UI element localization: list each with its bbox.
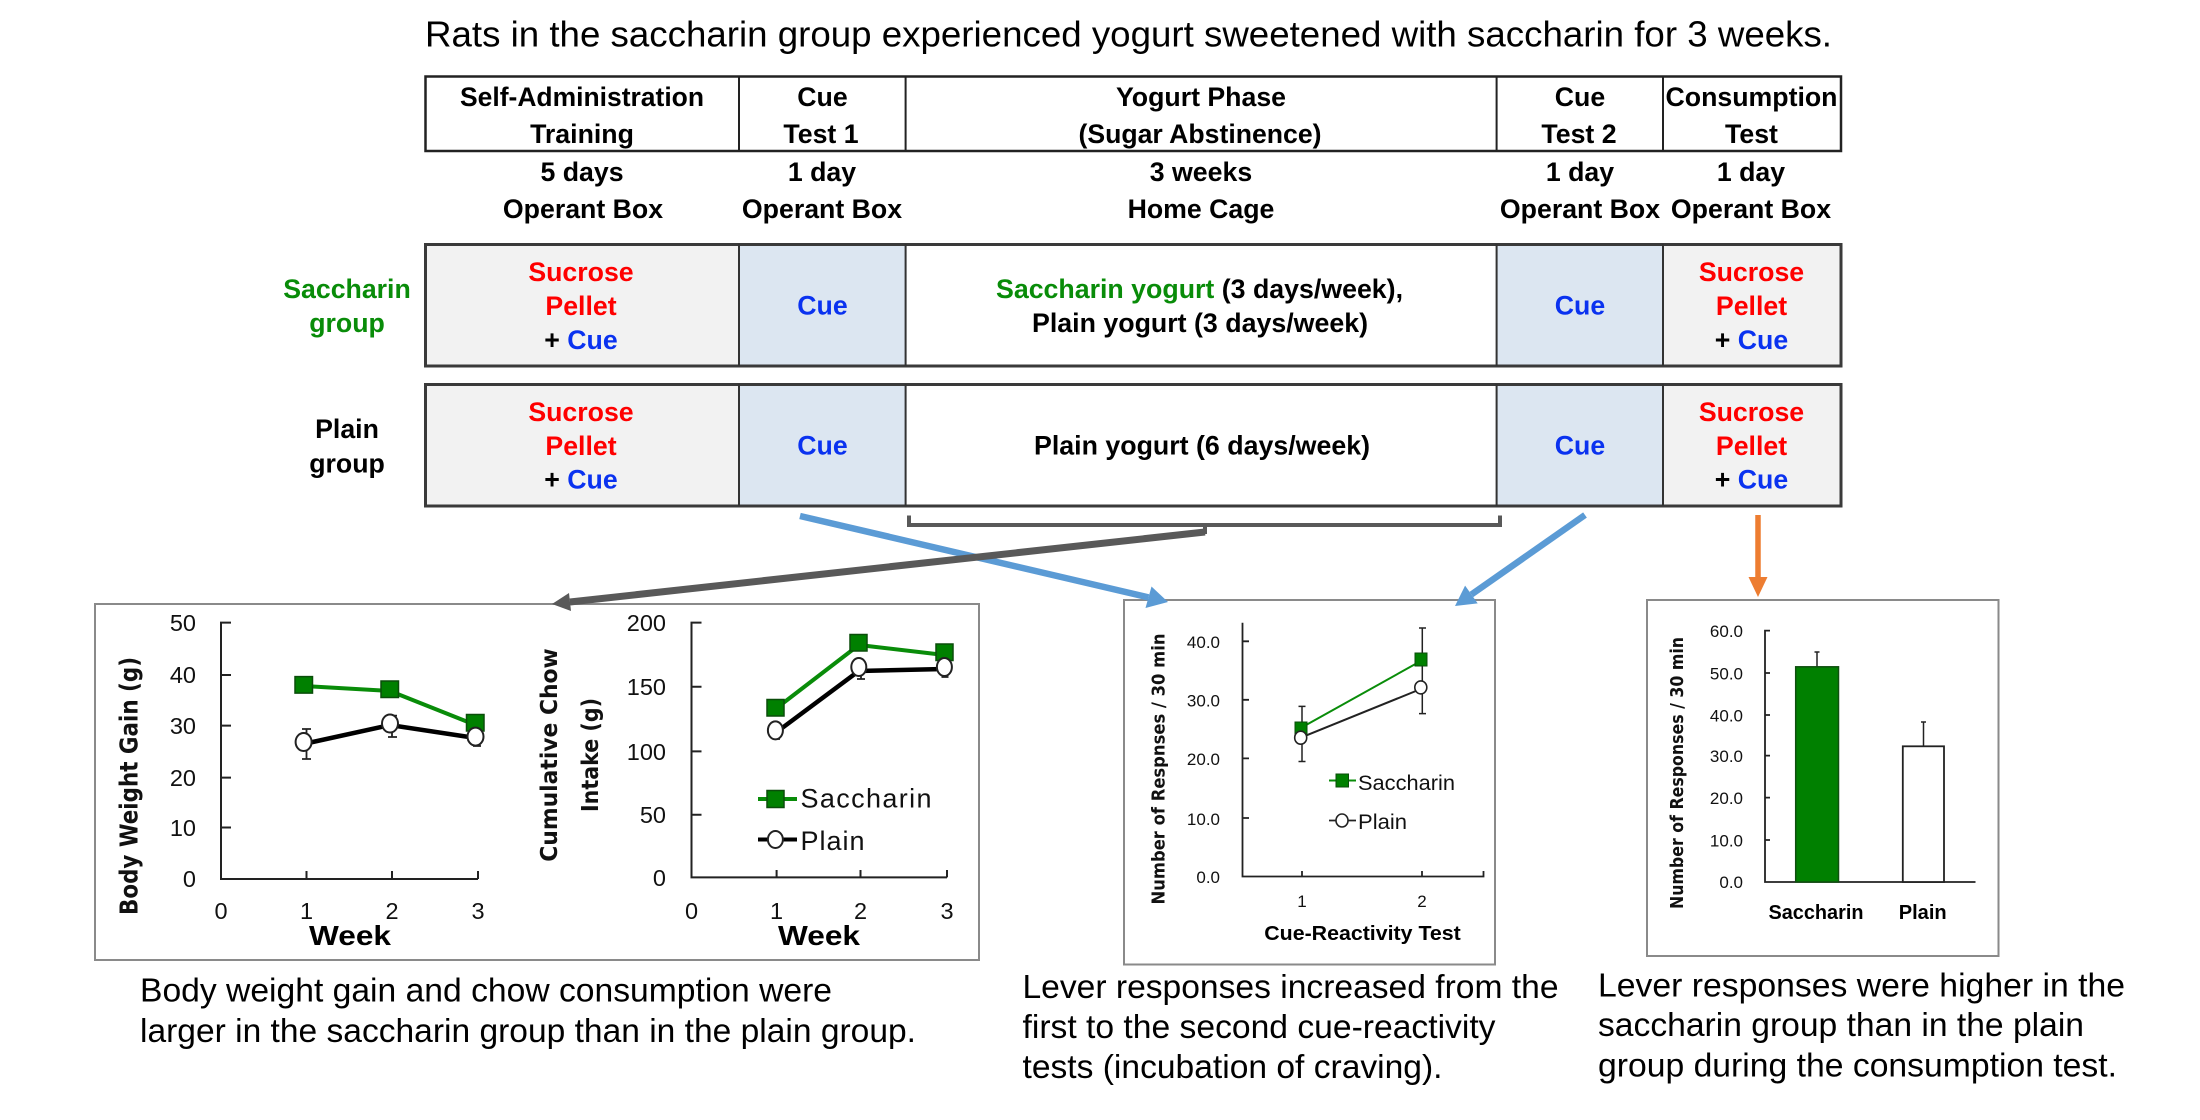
chart: cumulative chow intake: Cumulative Chow	[535, 648, 563, 862]
chart: body weight gain: 30	[170, 713, 196, 739]
panel: consumption test chart: 20.0	[1710, 789, 1743, 808]
durations and locations: 1 day	[1717, 157, 1785, 187]
chart: body weight gain: 3	[471, 898, 485, 924]
row: saccharin group schedule: Cue	[1555, 290, 1605, 320]
panel: consumption test chart: 30.0	[1710, 747, 1743, 766]
panel: consumption test chart: Saccharin	[1768, 901, 1864, 924]
chart: body weight gain	[114, 610, 485, 951]
phase header table: Test	[1725, 119, 1778, 149]
caption: cue-reactivity: Lever responses increased from the	[1022, 968, 1558, 1005]
durations and locations: Operant Box	[742, 194, 902, 224]
chart: cumulative chow intake: 50	[640, 802, 666, 828]
phase header table: Consumption	[1666, 82, 1838, 112]
panel: consumption test chart: Plain	[1899, 901, 1947, 924]
row: saccharin group schedule: Sucrose	[528, 257, 634, 287]
phase header table	[426, 76, 1841, 151]
chart: body weight gain: 0	[183, 866, 196, 892]
caption: cue-reactivity	[1022, 968, 1558, 1085]
durations and locations: Operant Box	[1671, 194, 1831, 224]
durations and locations: 1 day	[1546, 157, 1614, 187]
row: saccharin group schedule: Cue	[797, 290, 848, 320]
phase header table: Cue	[1555, 82, 1605, 112]
phase header table: Test 1	[783, 119, 859, 149]
row: plain group schedule: Plain yogurt (6 days/week)	[1034, 430, 1370, 460]
caption: consumption test: group during the consumption test.	[1598, 1046, 2117, 1084]
panel: cue-reactivity chart: 10.0	[1187, 810, 1220, 829]
phase header table: Yogurt Phase	[1116, 82, 1286, 112]
chart: cumulative chow intake: 2	[854, 898, 867, 924]
legend: Plain	[1358, 811, 1407, 834]
caption: body weight: Body weight gain and chow consumption were	[140, 972, 832, 1008]
legend	[1329, 772, 1455, 834]
label: saccharin group	[283, 274, 411, 338]
chart: cumulative chow intake: 150	[627, 674, 666, 700]
chart: cumulative chow intake: Week	[778, 920, 860, 951]
durations and locations: 1 day	[788, 157, 856, 187]
phase header table: Test 2	[1541, 119, 1617, 149]
label: plain group: Plain	[315, 414, 379, 444]
caption: consumption test	[1598, 966, 2125, 1084]
phase header table: (Sugar Abstinence)	[1078, 119, 1322, 149]
panel: cue-reactivity chart	[1124, 600, 1495, 964]
panel: cue-reactivity chart: 2	[1417, 892, 1427, 911]
chart: cumulative chow intake: 200	[627, 610, 666, 636]
row: saccharin group schedule: + Cue	[1715, 325, 1788, 355]
row: saccharin group schedule	[426, 244, 1841, 366]
phase header table: Cue	[797, 82, 848, 112]
caption: body weight	[140, 972, 916, 1049]
row: plain group schedule: Cue	[797, 430, 848, 460]
durations and locations	[503, 157, 1831, 224]
row: saccharin group schedule: + Cue	[544, 325, 618, 355]
row: plain group schedule: + Cue	[544, 464, 618, 494]
durations and locations: Operant Box	[503, 194, 663, 224]
label: saccharin group: Saccharin	[283, 274, 411, 304]
chart: body weight gain: 50	[170, 610, 196, 636]
chart: body weight gain: 2	[385, 898, 399, 924]
chart: cumulative chow intake: 1	[770, 898, 783, 924]
chart: body weight gain: 40	[170, 662, 196, 688]
label: plain group: group	[309, 448, 385, 478]
caption: consumption test: Lever responses were higher in the	[1598, 966, 2125, 1004]
panel: consumption test chart: 10.0	[1710, 832, 1743, 850]
legend: Plain	[800, 826, 864, 856]
chart: body weight gain: Body Weight Gain (g)	[114, 657, 144, 915]
arrow: blue, cue test 2 to cue-reactivity chart	[1455, 515, 1585, 606]
phase header table: Training	[530, 119, 634, 149]
chart: cumulative chow intake: Intake (g)	[576, 698, 604, 812]
row: saccharin group schedule: Pellet	[1716, 291, 1787, 321]
row: plain group schedule: Cue	[1555, 430, 1605, 460]
row: plain group schedule: Pellet	[1716, 431, 1787, 461]
bar: saccharin	[1796, 652, 1838, 882]
chart: body weight gain: Week	[309, 920, 391, 951]
phase header table: Self-Administration	[460, 82, 704, 112]
panel: cue-reactivity chart: 30.0	[1187, 692, 1220, 710]
label: saccharin group: group	[309, 308, 385, 338]
label: plain group	[309, 414, 385, 478]
bar: plain	[1903, 722, 1944, 882]
panel: consumption test chart	[1647, 600, 1998, 956]
row: saccharin group schedule: Sucrose	[1699, 257, 1804, 287]
arrow: blue, cue test 1 to cue-reactivity chart	[800, 516, 1168, 608]
row: plain group schedule: Pellet	[545, 431, 617, 461]
panel: consumption test chart: 0.0	[1719, 873, 1743, 892]
panel: consumption test chart: 40.0	[1710, 706, 1743, 726]
panel: cue-reactivity chart: 40.0	[1187, 633, 1220, 652]
panel: consumption test chart: Number of Responses / 30 min	[1668, 637, 1688, 909]
panel: consumption test chart: 50.0	[1710, 664, 1743, 684]
durations and locations: 3 weeks	[1150, 157, 1252, 187]
legend: Saccharin	[1358, 772, 1455, 795]
chart: cumulative chow intake: 0	[685, 898, 698, 924]
chart: body weight gain: 0	[214, 898, 228, 924]
title: Rats in the saccharin group experienced yogurt sweetened with saccharin for 3 weeks.	[425, 14, 1832, 54]
chart: cumulative chow intake	[535, 610, 954, 951]
chart: cumulative chow intake: 0	[653, 865, 666, 891]
caption: cue-reactivity: first to the second cue-reactivity	[1022, 1008, 1496, 1045]
chart: cumulative chow intake: 3	[940, 898, 954, 924]
panel: cue-reactivity chart: 0.0	[1196, 868, 1220, 887]
panel: consumption test chart: 60.0	[1710, 622, 1743, 641]
arrow: gray, yogurt phase to body weight charts	[552, 532, 1205, 611]
chart: body weight gain: 1	[300, 898, 313, 924]
legend: Saccharin	[800, 784, 932, 814]
legend	[758, 784, 932, 856]
panel: cue-reactivity chart: 20.0	[1187, 750, 1220, 769]
row: saccharin group schedule: Plain yogurt (3 days/week)	[1032, 308, 1368, 338]
durations and locations: Operant Box	[1500, 194, 1660, 224]
panel: cue-reactivity chart: Cue-Reactivity Test	[1264, 922, 1461, 945]
panel: cue-reactivity chart: Number of Respnses / 30 min	[1150, 634, 1170, 904]
arrow: orange, consumption test to bar chart	[1748, 515, 1768, 597]
caption: consumption test: saccharin group than in the plain	[1598, 1006, 2084, 1043]
row: saccharin group schedule: Saccharin yogurt (3 days/week),	[996, 274, 1403, 304]
row: plain group schedule: Sucrose	[528, 397, 634, 427]
panel: cue-reactivity chart: 1	[1297, 892, 1307, 911]
panel: body weight and chow charts	[95, 604, 979, 960]
row: plain group schedule: Sucrose	[1699, 397, 1804, 427]
caption: body weight: larger in the saccharin group than in the plain group.	[140, 1012, 916, 1049]
chart: body weight gain: 20	[170, 765, 196, 791]
chart: cumulative chow intake: 100	[627, 739, 666, 765]
row: plain group schedule: + Cue	[1715, 464, 1788, 494]
row: plain group schedule	[426, 384, 1841, 506]
caption: cue-reactivity: tests (incubation of craving).	[1022, 1048, 1442, 1085]
durations and locations: Home Cage	[1128, 194, 1274, 224]
row: saccharin group schedule: Pellet	[545, 291, 617, 321]
bracket: yogurt phase	[909, 516, 1500, 534]
durations and locations: 5 days	[540, 157, 624, 187]
chart: body weight gain: 10	[170, 815, 196, 841]
